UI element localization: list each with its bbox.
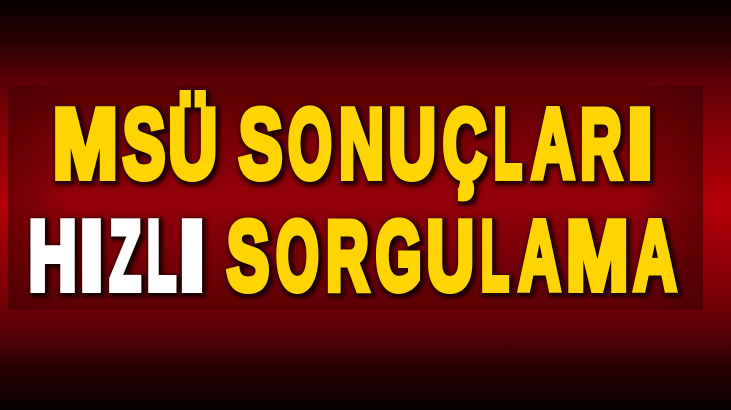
heading line 2: white word HIZLI: L [147,200,176,310]
heading line 1: MSÜ SONUÇLARI [53,88,653,198]
heading line 2: yellow word SORGULAMA: S [227,200,269,310]
heading line 2: yellow word SORGULAMA: A [634,200,676,310]
heading line 2: white word HIZLI: H [28,200,77,310]
heading line 1: MSÜ SONUÇLARI: A [532,88,574,198]
heading line 1: MSÜ SONUÇLARI: Ü [168,88,217,198]
heading line 1: MSÜ SONUÇLARI: I [627,88,653,198]
heading line 1: MSÜ SONUÇLARI: U [388,88,436,198]
heading line 2: white word HIZLI: I [179,200,205,310]
heading line 1: MSÜ SONUÇLARI: S [123,88,165,198]
heading line 2: yellow word SORGULAMA [227,200,677,310]
heading line 1: MSÜ SONUÇLARI: Ç [443,88,486,198]
heading line 1: MSÜ SONUÇLARI: N [339,88,384,198]
heading line 1: MSÜ SONUÇLARI: L [494,88,522,198]
heading line 2: white word HIZLI: I [80,200,104,310]
inner banner panel [8,86,703,310]
heading line 2: yellow word SORGULAMA: A [518,200,560,310]
heading line 1: MSÜ SONUÇLARI: O [288,88,332,198]
heading line 2: yellow word SORGULAMA: O [276,200,319,310]
heading line 2: yellow word SORGULAMA: R [326,200,369,310]
heading line 2: yellow word SORGULAMA: M [566,200,628,310]
heading line 2: yellow word SORGULAMA: L [481,200,509,310]
heading line 2: white word HIZLI: Z [110,200,141,310]
heading line 1: MSÜ SONUÇLARI: M [53,88,118,198]
heading line 2: yellow word SORGULAMA: U [426,200,474,310]
heading line 2: yellow word SORGULAMA: G [376,200,422,310]
heading line 1: MSÜ SONUÇLARI: R [580,88,622,198]
heading line 1: MSÜ SONUÇLARI: S [239,88,282,198]
heading line 2: white word HIZLI [28,200,205,310]
